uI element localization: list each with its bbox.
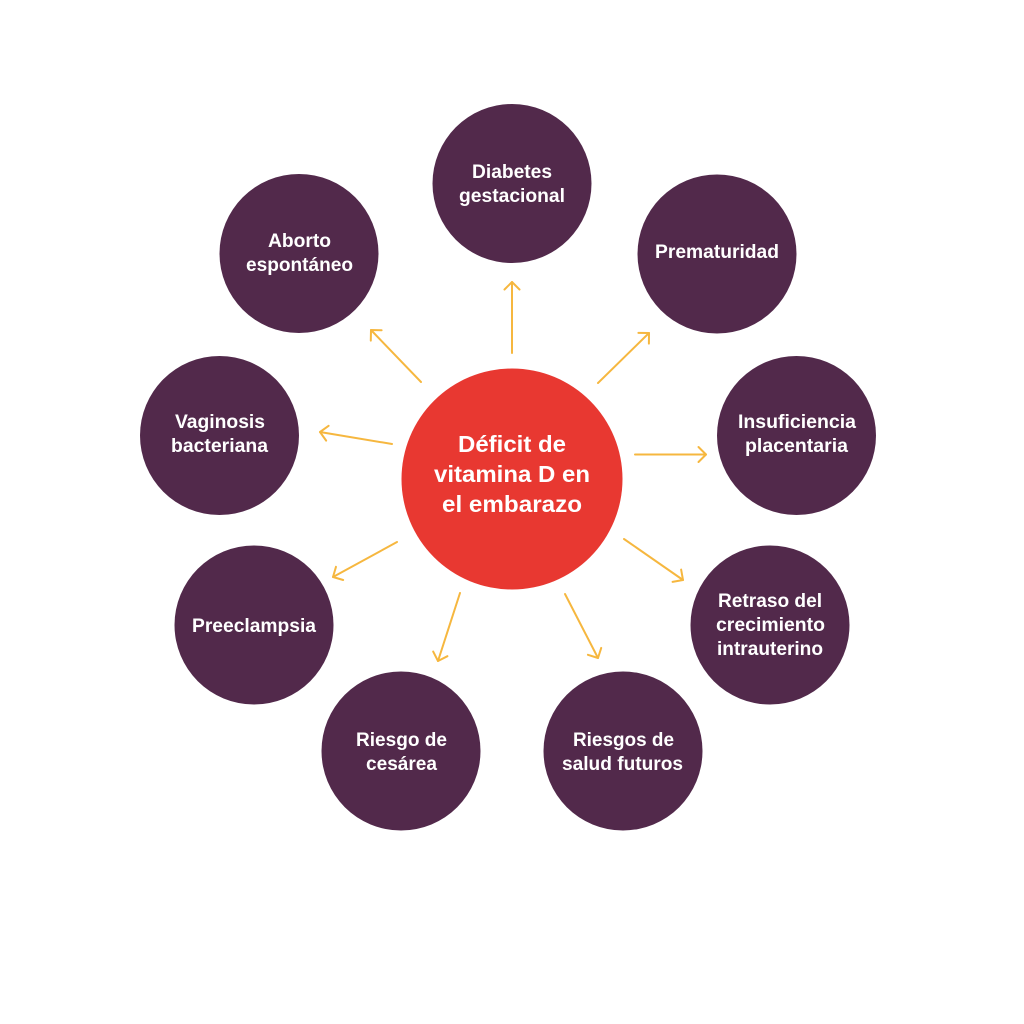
node: Vaginosis bacteriana: bacteriana [171,436,268,457]
node: Aborto espontáneo: Aborto [268,231,331,252]
arrow: to Prematuridad [598,333,649,383]
node: Diabetes gestacional: gestacional [459,186,565,207]
arrow: to Retraso del crecimiento intrauterino [624,539,683,580]
node: Riesgo de cesárea: cesárea [366,754,437,775]
center node: Déficit de vitamina D en el embarazo: vitamina D en [434,461,590,487]
node: Prematuridad: Prematuridad [655,242,779,263]
node: Retraso del crecimiento intrauterino: intrauterino [717,639,823,660]
node: Retraso del crecimiento intrauterino: crecimiento [716,615,825,636]
node: Preeclampsia [174,546,334,704]
node: Insuficiencia placentaria: Insuficiencia [738,412,856,433]
center node: Déficit de vitamina D en el embarazo: el embarazo [442,491,582,517]
node: Riesgos de salud futuros: Riesgos de [573,730,674,751]
arrow: to Aborto espontáneo [371,330,421,382]
arrow: to Insuficiencia placentaria [635,454,706,456]
arrow: to Preeclampsia [333,542,397,577]
node: Riesgo de cesárea: Riesgo de [356,730,447,751]
node: Insuficiencia placentaria: placentaria [745,436,848,457]
node: Preeclampsia: Preeclampsia [192,616,316,637]
node: Prematuridad [638,174,796,334]
node: Aborto espontáneo [220,174,378,333]
node: Diabetes gestacional [432,104,592,263]
node: Riesgo de cesárea [322,672,480,830]
node: Diabetes gestacional: Diabetes [472,162,552,183]
node: Vaginosis bacteriana: Vaginosis [175,412,265,433]
center node: Déficit de vitamina D en el embarazo: Déficit de [458,431,566,457]
arrow: to Vaginosis bacteriana [320,432,392,444]
node: Riesgos de salud futuros [544,672,702,830]
arrow: to Riesgos de salud futuros [565,594,598,658]
arrow: to Diabetes gestacional [511,282,513,353]
node: Riesgos de salud futuros: salud futuros [562,754,683,775]
center node: Déficit de vitamina D en el embarazo [402,368,622,590]
node: Retraso del crecimiento intrauterino: Retraso del [718,591,822,612]
node: Retraso del crecimiento intrauterino [690,546,850,704]
node: Aborto espontáneo: espontáneo [246,255,353,276]
node: Insuficiencia placentaria [717,356,876,515]
node: Vaginosis bacteriana [140,356,299,515]
arrow: to Riesgo de cesárea [438,593,460,661]
